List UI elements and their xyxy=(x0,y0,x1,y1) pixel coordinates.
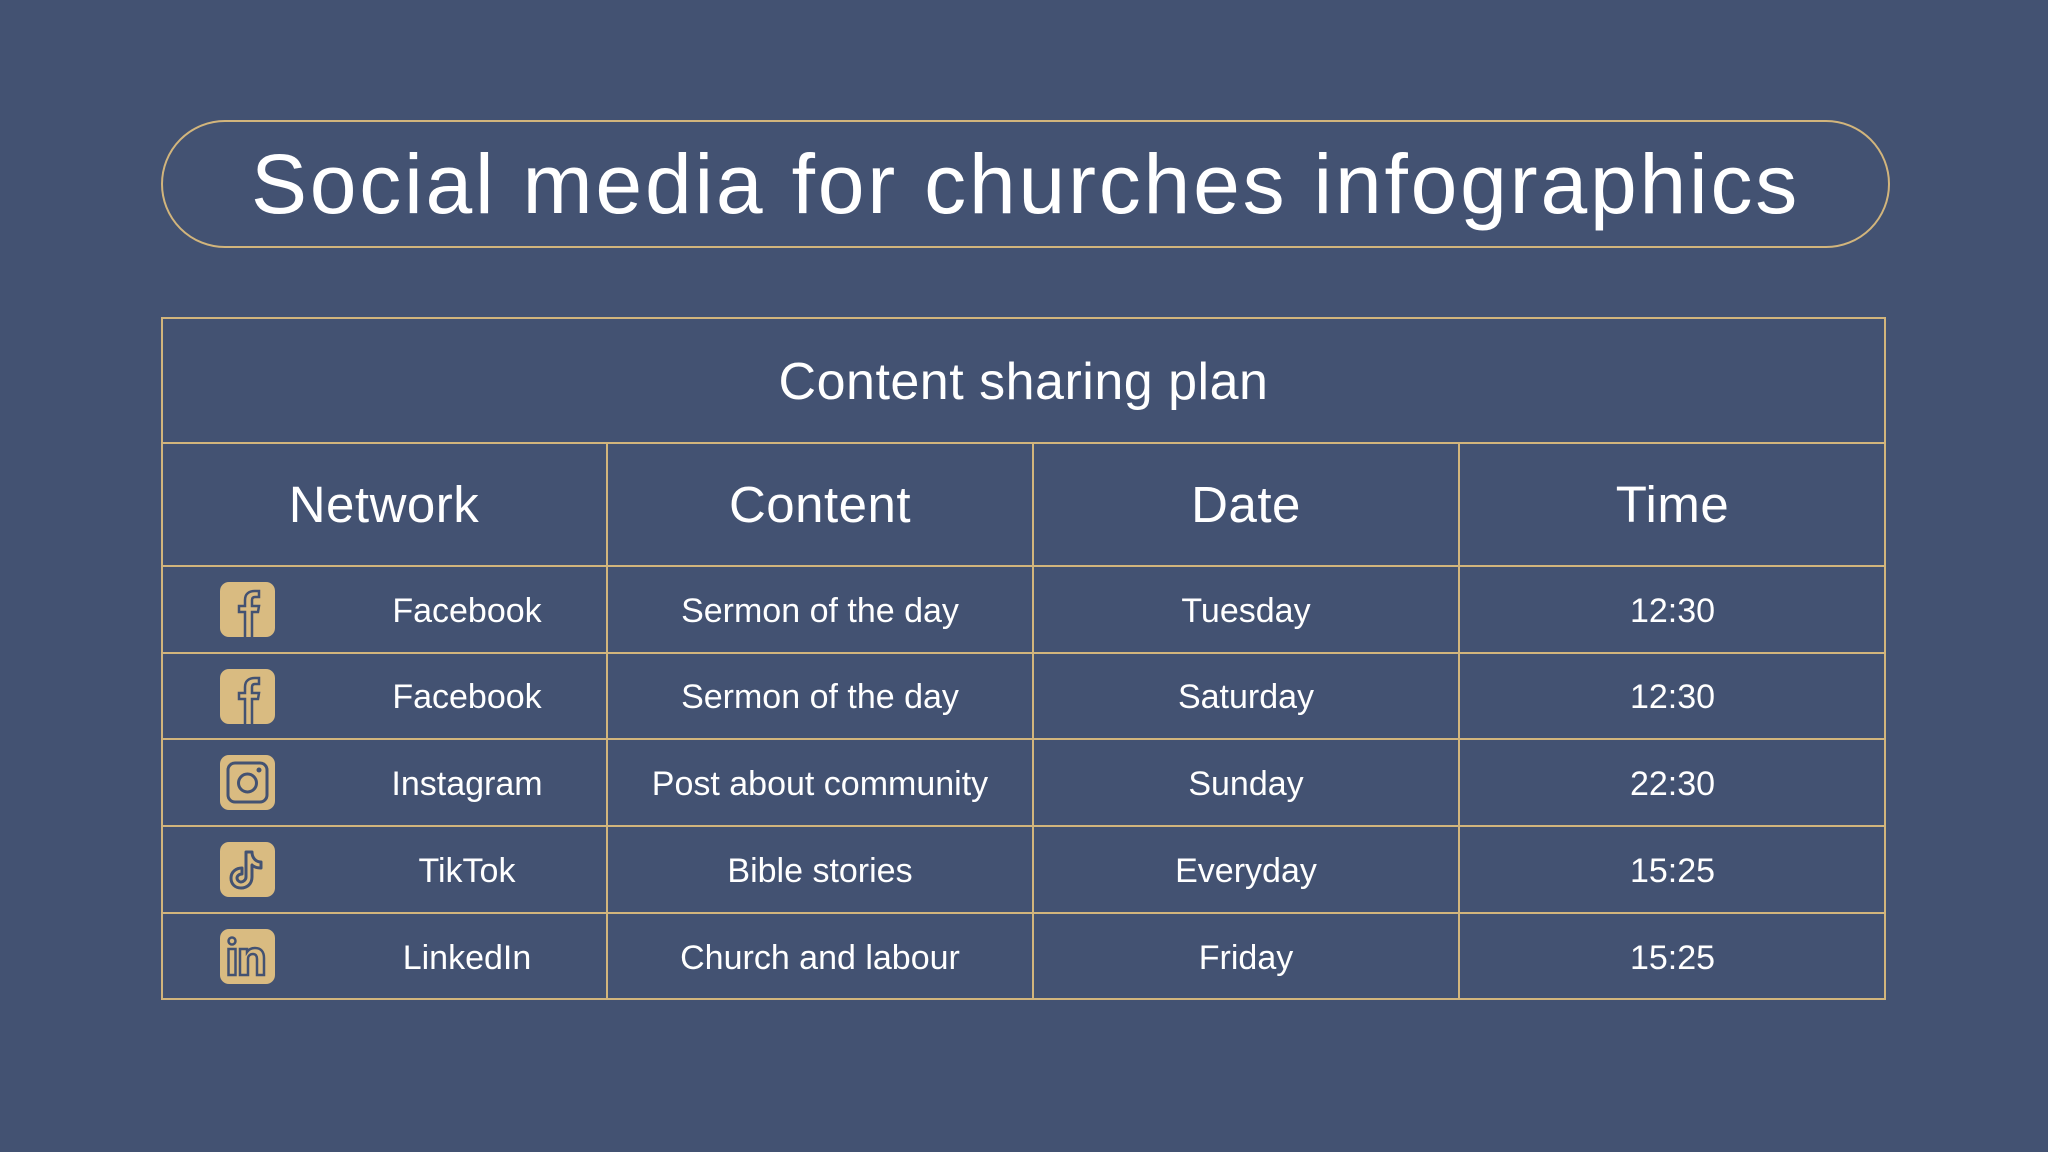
column headers: Network xyxy=(289,476,479,533)
row 5: LinkedIn xyxy=(403,938,531,976)
row 3: Post about community xyxy=(652,764,988,802)
row 4 xyxy=(220,842,1715,897)
row 5: 15:25 xyxy=(1630,938,1715,976)
row 5 xyxy=(220,929,1715,984)
icon: facebook xyxy=(220,669,275,724)
row 1: 12:30 xyxy=(1630,592,1715,630)
column headers xyxy=(289,476,1729,533)
icon: facebook xyxy=(220,582,275,637)
column headers: Date xyxy=(1191,476,1301,533)
icon: instagram xyxy=(220,755,275,810)
row 1: Tuesday xyxy=(1181,592,1311,630)
row 2: Facebook xyxy=(392,678,542,716)
column headers: Content xyxy=(729,476,911,533)
row 5: Friday xyxy=(1199,938,1293,976)
table heading: Content sharing plan xyxy=(779,353,1268,411)
row 2: 12:30 xyxy=(1630,678,1715,716)
row 2: Saturday xyxy=(1178,678,1314,716)
row 1: Sermon of the day xyxy=(681,592,959,630)
icon: linkedin xyxy=(220,929,275,984)
row 3: Instagram xyxy=(391,764,543,802)
row 1: Facebook xyxy=(392,592,542,630)
row 4: Bible stories xyxy=(727,852,913,890)
row 4: 15:25 xyxy=(1630,852,1715,890)
title: Social media for churches infographics xyxy=(251,136,1800,230)
title xyxy=(161,120,1890,248)
row 3: 22:30 xyxy=(1630,764,1715,802)
table: content sharing plan xyxy=(161,317,1886,1000)
row 2 xyxy=(220,669,1715,724)
row 4: Everyday xyxy=(1175,852,1317,890)
row 4: TikTok xyxy=(418,852,515,890)
icon: tiktok xyxy=(220,842,275,897)
row 2: Sermon of the day xyxy=(681,678,959,716)
row 1 xyxy=(220,582,1715,637)
row 5: Church and labour xyxy=(680,938,960,976)
column headers: Time xyxy=(1616,476,1729,533)
row 3: Sunday xyxy=(1188,764,1304,802)
row 3 xyxy=(220,755,1715,810)
